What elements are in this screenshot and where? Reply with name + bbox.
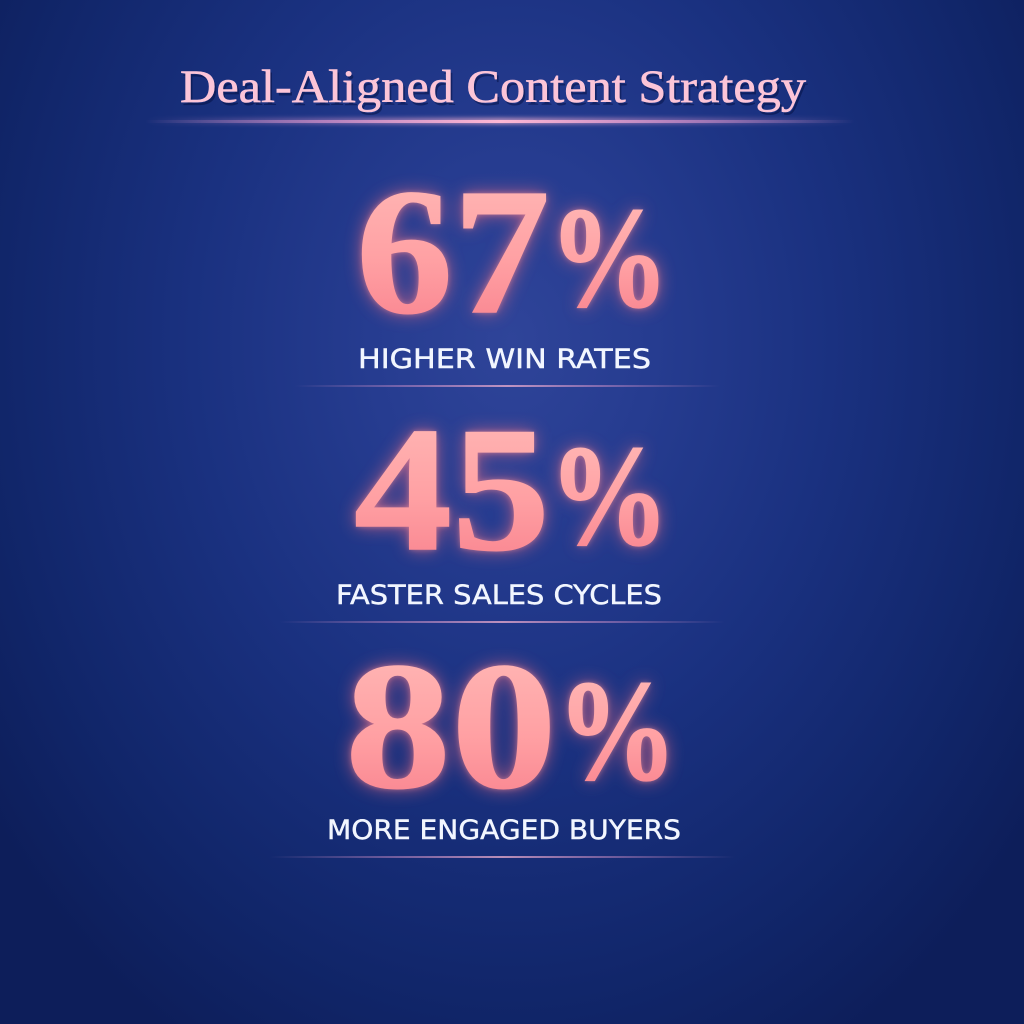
title divider [145,118,855,124]
number: 45%: % [549,417,669,576]
number: 80%: % [557,652,677,811]
number: 80%: 80 [345,626,557,827]
number: 45%: 45 [354,390,550,588]
number: 80%: 80 [345,626,557,827]
number: 67%: % [549,179,669,338]
number: 67%: 67 [356,152,550,351]
label: higher win rates: HIGHER WIN RATES [358,344,651,375]
number: 80% [345,626,677,827]
stat: 45% faster sales cycles [336,390,669,611]
number: 67%: % [549,179,669,338]
number: 80%: % [557,652,677,811]
number: 45% [354,390,669,588]
number: 80%: 80 [345,626,557,827]
label: faster sales cycles: FASTER SALES CYCLES [336,580,662,611]
number: 45%: % [549,417,669,576]
stat: 80% more engaged buyers [327,626,681,846]
divider 1 [295,385,720,387]
title: Deal-Aligned Content Strategy [180,61,807,113]
title: Deal-Aligned Content Strategy [182,64,809,116]
number: 67%: 67 [356,152,550,351]
number: 45%: % [549,417,669,576]
number: 67%: 67 [356,152,550,351]
divider 2 [280,621,725,623]
number: 67% [356,152,669,351]
divider 3 [270,856,735,858]
number: 45%: 45 [354,390,550,588]
label: more engaged buyers: MORE ENGAGED BUYERS [327,815,681,846]
number: 67%: % [549,179,669,338]
number: 80%: % [557,652,677,811]
number: 45%: 45 [354,390,550,588]
stat: 67% higher win rates [356,152,669,375]
